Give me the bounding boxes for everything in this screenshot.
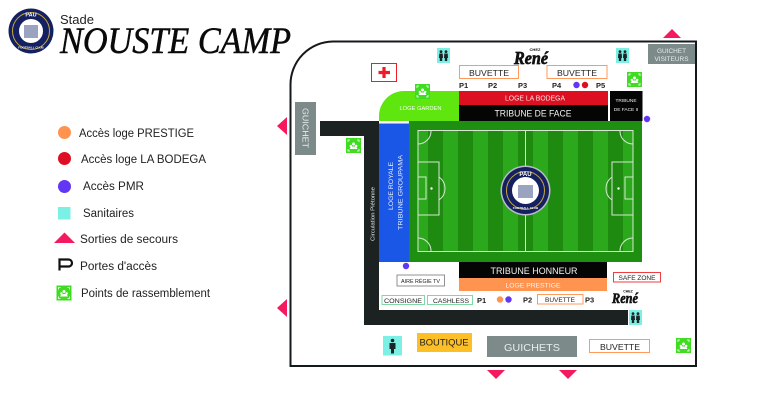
south gate labels: P2 (523, 296, 532, 304)
club logo: FOOTBALL CLUB (18, 46, 45, 50)
guichet west (295, 102, 316, 155)
pitch logo (500, 166, 550, 216)
loge garden (379, 91, 459, 121)
loge royale: TRIBUNE GROUPAMA (398, 154, 404, 230)
aire régie TV: AIRE RÉGIE TV (401, 278, 440, 285)
cashless (428, 296, 472, 305)
buvette south: BUVETTE (600, 342, 640, 352)
chez rené logo north: CHEZ (530, 47, 541, 52)
PMR dot west (403, 263, 409, 269)
football pitch (409, 121, 642, 262)
north gate labels: P2 (488, 81, 497, 90)
legend: sorties de secours: Sorties de secours (80, 234, 178, 246)
south gate labels: P1 (477, 296, 486, 305)
tribune de face (459, 105, 608, 121)
buvette south inner: BUVETTE (545, 297, 576, 304)
access dots south (497, 296, 512, 303)
guichets (487, 336, 577, 357)
buvette north 2: BUVETTE (557, 68, 597, 78)
tribune de face II: TRIBUNE (615, 98, 637, 104)
legend: accès loge la bodega: Accès loge LA BODEGA (81, 154, 206, 166)
tribune honneur (459, 262, 607, 278)
club logo (8, 8, 54, 54)
south gate labels: P3 (585, 296, 594, 304)
aire régie TV (397, 275, 444, 286)
tribune honneur: TRIBUNE HONNEUR (490, 266, 578, 277)
loge la bodega: LOGE LA BODEGA (505, 96, 565, 102)
buvette north 2 (547, 66, 607, 78)
chez rené logo south: CHEZ (623, 290, 634, 294)
consigne: CONSIGNE (384, 298, 423, 305)
pitch logo: FOOTBALL CLUB (513, 206, 539, 210)
tribune de face II (610, 91, 642, 121)
circulation piétonne: Circulation Piétonne (370, 187, 376, 241)
access dots north (573, 82, 650, 122)
sanitaires icons (383, 48, 642, 356)
buvette north 1 (460, 66, 518, 78)
guichet visiteurs (648, 44, 695, 64)
chez rené logo north: René (513, 48, 549, 68)
tribune de face II: DE FACE II (614, 107, 638, 113)
tribune de face: TRIBUNE DE FACE (494, 108, 572, 120)
loge royale: LOGE ROYALE (388, 161, 395, 210)
legend (54, 126, 211, 300)
safe zone: SAFE ZONE (618, 276, 656, 282)
north gate labels: P4 (552, 81, 562, 90)
north gate labels: P5 (596, 81, 605, 90)
buvette south (590, 340, 650, 352)
legend: accès PMR: Accès PMR (83, 181, 144, 193)
loge la bodega (459, 91, 608, 105)
buvette north 1: BUVETTE (469, 68, 509, 78)
legend: sorties de secours (54, 232, 178, 246)
legend: points de rassemblement (56, 286, 211, 300)
legend: portes d'accès (60, 260, 157, 273)
loge royale (379, 124, 409, 262)
guichet visiteurs: VISITEURS (654, 57, 688, 63)
guichet west: GUICHET (300, 108, 310, 148)
inner white area (379, 262, 628, 310)
title: NOUSTE CAMP (59, 21, 291, 62)
safe zone (614, 272, 660, 282)
guichet visiteurs: GUICHET (657, 49, 686, 55)
north gate labels (459, 81, 605, 90)
north gate labels: P1 (459, 81, 468, 90)
cashless: CASHLESS (433, 298, 469, 305)
legend: accès loge prestige: Accès loge PRESTIGE (79, 128, 194, 140)
loge garden: LOGE GARDEN (400, 106, 442, 112)
circulation piétonne (320, 121, 628, 325)
heading: Stade: Stade (60, 12, 94, 27)
rassemblement icons (346, 72, 691, 353)
chez rené logo south: René (611, 291, 639, 307)
legend: points de rassemblement: Points de rassemblement (81, 288, 211, 300)
loge prestige: LOGE PRESTIGE (506, 282, 561, 290)
consigne (382, 296, 424, 305)
buvette south inner (538, 294, 583, 304)
legend: sanitaires (58, 207, 134, 220)
stadium outline (290, 42, 696, 366)
boutique (417, 333, 472, 352)
south gate labels (477, 296, 594, 305)
legend: accès PMR (58, 180, 144, 193)
emergency exits (277, 29, 681, 379)
legend: sanitaires: Sanitaires (83, 208, 134, 220)
first aid (372, 64, 396, 82)
club logo: PAU (25, 12, 37, 18)
boutique: BOUTIQUE (420, 338, 468, 348)
pitch logo: PAU (519, 172, 532, 178)
guichets: GUICHETS (504, 343, 560, 354)
north gate labels: P3 (518, 81, 527, 90)
loge prestige (459, 278, 607, 291)
legend: portes d'accès: Portes d'accès (80, 261, 157, 273)
